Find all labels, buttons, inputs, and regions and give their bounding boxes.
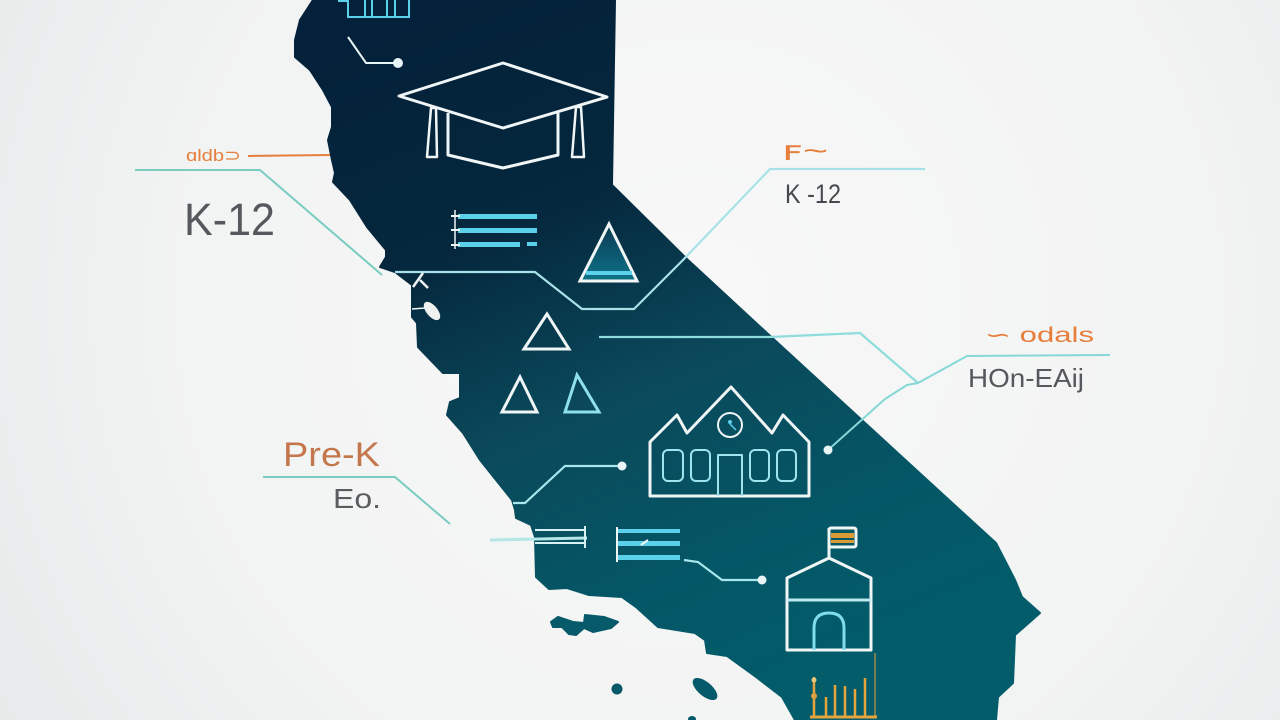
island: oval [689, 674, 721, 704]
heading: K-12 left: K-12 [184, 194, 275, 245]
icon: school with flag [787, 528, 871, 650]
icon: triangle right [565, 375, 599, 412]
connector lines in teal [135, 169, 1110, 540]
connector: top dot [348, 37, 402, 67]
orange leader line [248, 155, 330, 156]
map of California [295, 0, 1040, 720]
connector: Pre-K [263, 477, 450, 524]
dot: Home connector end [824, 446, 832, 454]
icon: filled triangle [580, 224, 637, 281]
connector: school dot [513, 462, 626, 503]
icon: top bar chart [338, 0, 409, 17]
icon: small list left [535, 526, 585, 548]
heading: Ed: Eo. [333, 483, 381, 514]
connector: list dot [684, 560, 766, 584]
island: south tip [688, 716, 696, 720]
bay inlet [421, 299, 443, 323]
orange label left: ɑldb⊃ [186, 146, 241, 165]
orange label right: ∽ odals [985, 324, 1094, 347]
icon: bay marker [412, 273, 428, 309]
heading: Home: HOn-EAij [968, 363, 1084, 393]
heading: Pre-K: Pre-K [283, 436, 380, 474]
icon: graduation cap [399, 63, 607, 168]
icon: triangle top [524, 314, 569, 349]
connector: right K-12 [395, 169, 925, 309]
connector: Pre-K list [490, 538, 587, 540]
island: small round [612, 684, 622, 694]
island: channel islands north [551, 615, 618, 635]
connector: Home dot line [828, 355, 1110, 450]
icon: triangle left [502, 377, 537, 412]
connector: Home [599, 333, 918, 383]
icon: school house [650, 387, 809, 496]
orange label top right: ꜰ~ [782, 136, 828, 166]
icon: list lines [451, 210, 537, 249]
heading: K-12 right: K -12 [785, 179, 841, 209]
connector: left K-12 [135, 170, 382, 275]
icon: list bars [617, 527, 680, 562]
icon: orange bar chart [810, 653, 877, 718]
